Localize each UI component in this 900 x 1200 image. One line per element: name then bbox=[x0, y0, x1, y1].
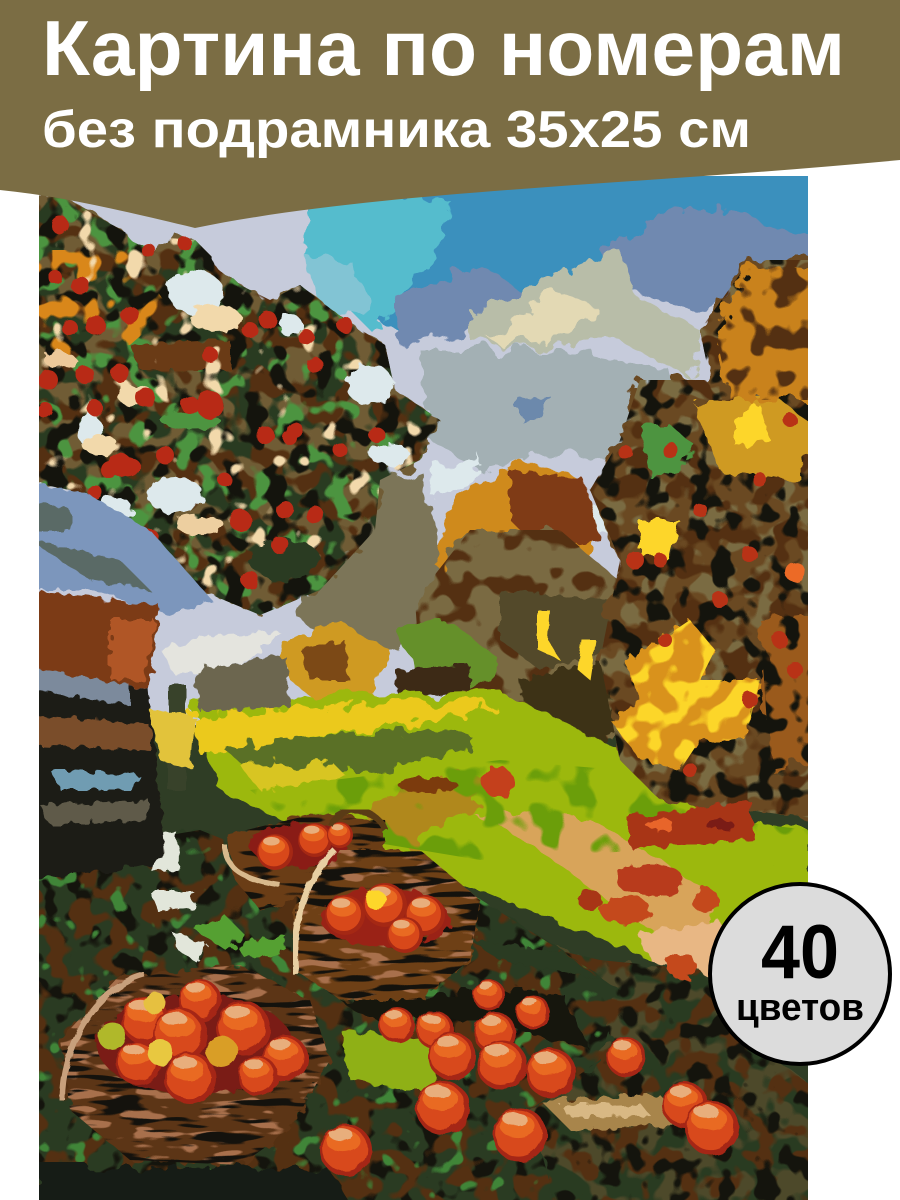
far trees bbox=[280, 458, 617, 744]
red apples on tree bbox=[37, 216, 385, 589]
painting bbox=[20, 160, 830, 1200]
badge: 40 colours: 40 bbox=[761, 910, 839, 995]
fallen apple row bbox=[578, 800, 755, 979]
red apples on right tree bbox=[618, 413, 805, 777]
header banner bbox=[0, 0, 900, 228]
basket: medium bbox=[295, 850, 480, 1000]
basket: large bbox=[60, 965, 330, 1165]
apples in large basket bbox=[98, 979, 308, 1104]
title: Картина по номерам bbox=[42, 4, 845, 92]
basket: small bbox=[225, 811, 385, 910]
apple tree left bbox=[20, 195, 440, 615]
meadow bbox=[190, 690, 810, 980]
ground path at right bbox=[530, 944, 808, 1200]
badge: 40 colours bbox=[710, 884, 890, 1064]
fallen-apple patch on meadow bbox=[398, 767, 514, 797]
shed and fence bbox=[20, 480, 290, 880]
badge: 40 colours: цветов bbox=[736, 987, 864, 1029]
meadow patches bbox=[250, 760, 810, 870]
apples on ground bbox=[320, 979, 739, 1176]
subtitle: без подрамника 35х25 см bbox=[42, 101, 751, 159]
right tree bbox=[590, 260, 830, 820]
foreground ground bbox=[20, 830, 620, 1200]
sky and clouds bbox=[20, 160, 830, 720]
sky gaps in the tree bbox=[44, 203, 410, 580]
